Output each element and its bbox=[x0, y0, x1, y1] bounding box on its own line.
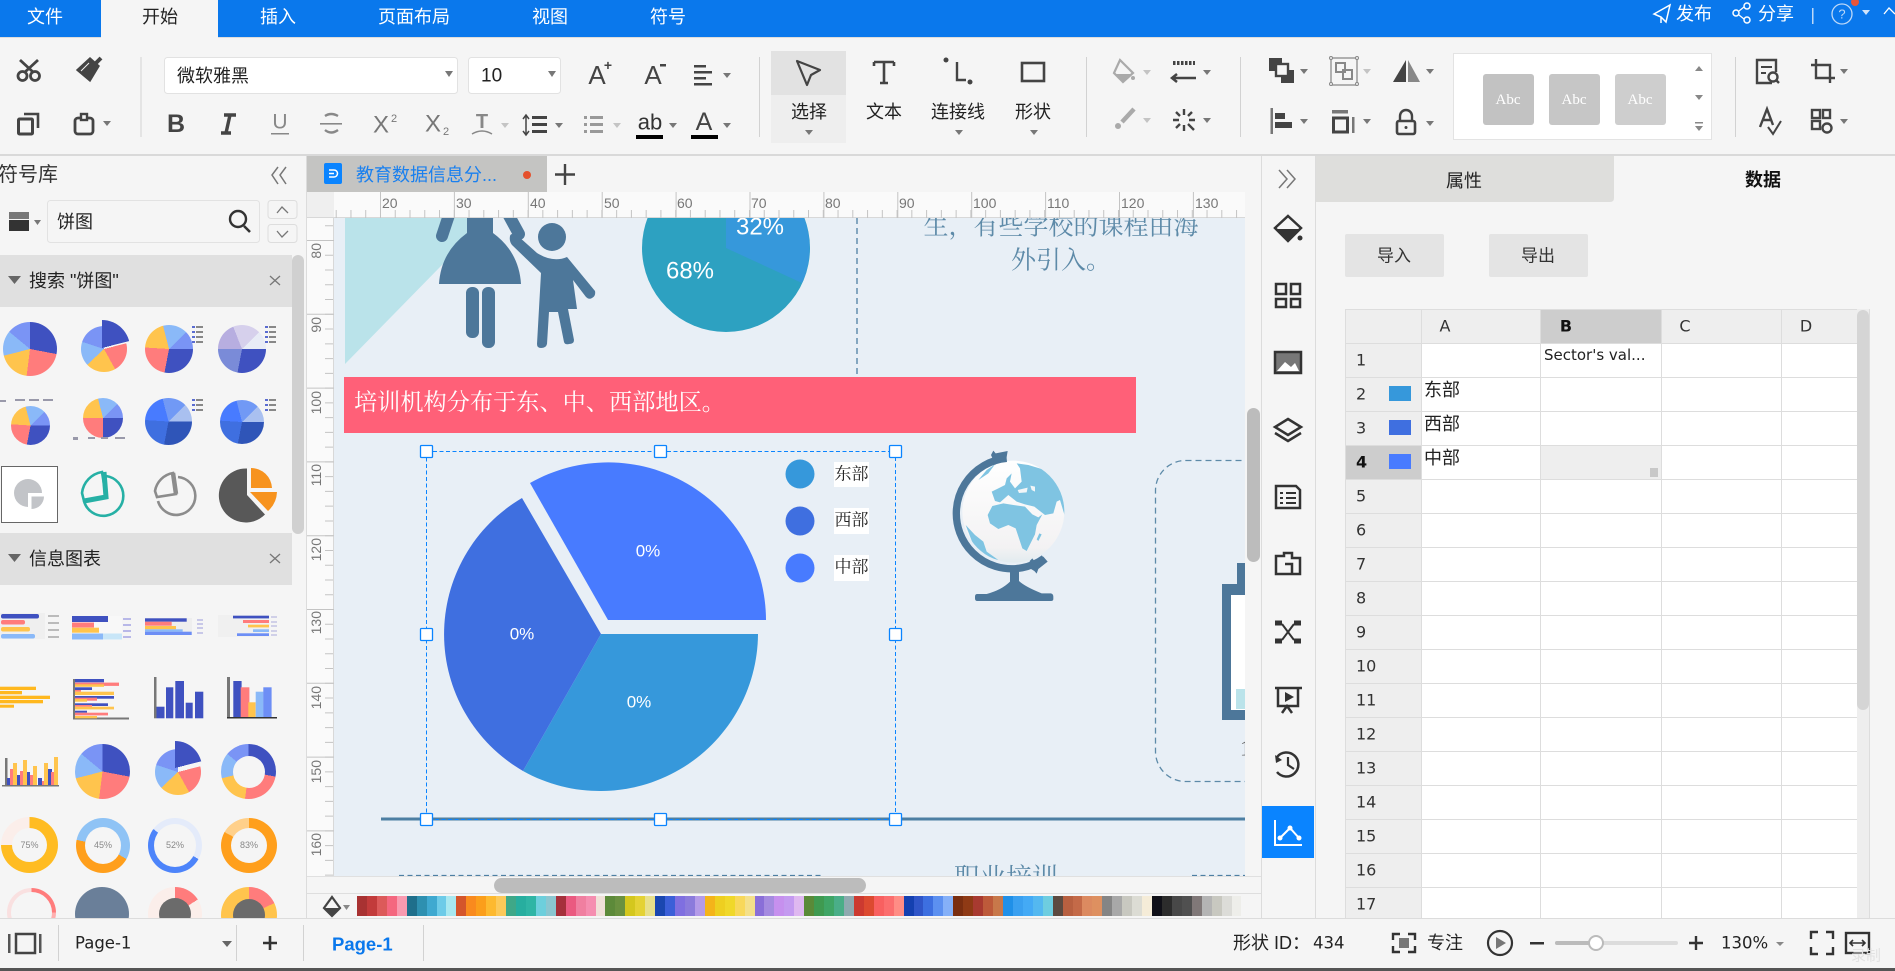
export button bbox=[1489, 234, 1588, 277]
text format icons: U bbox=[272, 110, 288, 134]
shape id readout bbox=[1233, 933, 1344, 953]
data table: 5 bbox=[1356, 486, 1366, 506]
icon: mother and child bbox=[439, 210, 595, 348]
bar chart thumbnails bbox=[0, 614, 277, 786]
document tab strip bbox=[307, 156, 1261, 192]
data table: 西部 bbox=[1424, 414, 1460, 434]
focus mode control bbox=[1393, 933, 1463, 953]
data table bbox=[1345, 309, 1857, 918]
library scrollbar bbox=[292, 255, 304, 534]
vertical ruler: 130 bbox=[308, 611, 324, 634]
pie outline icons and mini legends bbox=[0, 326, 277, 522]
shape tool button bbox=[1015, 63, 1051, 122]
data table: 3 bbox=[1356, 418, 1366, 438]
symbol library panel bbox=[0, 156, 307, 918]
shape tool button: 形状 bbox=[1015, 102, 1051, 122]
text format icons: ab bbox=[638, 110, 662, 134]
data table scrollbar bbox=[1857, 309, 1870, 918]
faint recording watermark: 录制 bbox=[1851, 948, 1881, 964]
main pie chart: 0% bbox=[627, 692, 651, 712]
pie thumbnail row 3 wedge bbox=[148, 741, 202, 795]
selected thumbnail white box bbox=[1, 466, 58, 523]
connector tool button bbox=[931, 58, 985, 122]
text format icons: A bbox=[644, 60, 662, 90]
data table: 7 bbox=[1356, 554, 1366, 574]
donut 75 percent bbox=[1, 817, 58, 873]
connector tool button: 连接线 bbox=[931, 102, 985, 122]
horizontal ruler: 60 bbox=[677, 195, 693, 211]
font family selector: 微软雅黑 bbox=[177, 66, 249, 86]
horizontal ruler: 70 bbox=[751, 195, 767, 211]
main pie chart: 0% bbox=[510, 624, 534, 644]
bottom status bar: Page-1 bbox=[75, 934, 131, 952]
donut 83 percent bbox=[221, 818, 277, 873]
data table: C bbox=[1679, 316, 1691, 336]
right properties panel background and tabs: 属性 bbox=[1446, 171, 1482, 191]
vertical ruler: 160 bbox=[308, 833, 324, 856]
vertical ruler: 90 bbox=[308, 317, 324, 333]
pie thumbnail 6 bbox=[83, 398, 123, 438]
colour palette bar background and fill icon bbox=[307, 893, 1261, 918]
top menu bar: 符号 bbox=[650, 7, 686, 27]
top menu bar: 页面布局 bbox=[378, 7, 450, 27]
text format icons: X bbox=[425, 110, 441, 138]
pie thumbnail 1 bbox=[3, 322, 57, 376]
horizontal ruler: 50 bbox=[604, 195, 620, 211]
donut 45 percent: 45% bbox=[94, 840, 112, 850]
pie thumbnail 3 with legend bbox=[145, 325, 193, 373]
library section header: search: 搜索 "饼图" bbox=[29, 271, 119, 291]
top menu bar: 插入 bbox=[260, 7, 296, 27]
text tool button: 文本 bbox=[866, 102, 902, 122]
active chart data tab icon bbox=[1262, 806, 1314, 858]
data table: 4 bbox=[1356, 452, 1367, 472]
canvas scrollbars bbox=[307, 218, 1261, 894]
vertical ruler: 140 bbox=[308, 686, 324, 709]
top menu bar: 视图 bbox=[532, 7, 568, 27]
right sidebar icons bbox=[1261, 156, 1316, 918]
import button bbox=[1345, 234, 1444, 277]
clipboard icons bbox=[18, 58, 101, 134]
lower dashed boxes tops bbox=[399, 874, 1245, 876]
text block: foreign courses: 外引入。 bbox=[1011, 246, 1111, 274]
horizontal ruler: 130 bbox=[1195, 195, 1219, 211]
data table: Sector's val... bbox=[1544, 346, 1645, 364]
vertical ruler: 150 bbox=[308, 760, 324, 783]
text format icons: 2 bbox=[443, 126, 449, 138]
pie thumbnail 7 blue bbox=[145, 398, 192, 445]
top menu bar: ? bbox=[1838, 6, 1846, 22]
page tools icons bbox=[1757, 59, 1835, 134]
pink banner heading: 培训机构分布于东、中、西部地区。 bbox=[354, 390, 725, 416]
donut thumbnail row 3 bbox=[221, 744, 276, 799]
data table: 17 bbox=[1356, 894, 1376, 914]
export button: 导出 bbox=[1521, 246, 1555, 266]
library section header: infographics: 信息图表 bbox=[29, 549, 101, 569]
disabled dropdown arrows in toolbar bbox=[501, 69, 1371, 128]
chart legend: 中部 bbox=[834, 558, 868, 576]
horizontal ruler bbox=[307, 192, 1245, 218]
data table: 9 bbox=[1356, 622, 1366, 642]
shape id readout: 形状 ID： bbox=[1233, 933, 1310, 953]
pie thumbnail row 3 b bbox=[155, 749, 201, 795]
vertical ruler: 80 bbox=[308, 243, 324, 259]
selection frame with handles bbox=[420, 446, 902, 826]
text format icons: A bbox=[696, 108, 713, 136]
data table: 11 bbox=[1356, 690, 1376, 710]
data table: D bbox=[1800, 316, 1812, 336]
data table: A bbox=[1440, 316, 1451, 336]
pie thumbnail 8 blue bbox=[220, 400, 264, 444]
text tool button bbox=[866, 62, 902, 122]
clipped gauge thumbnail 2 bbox=[75, 887, 129, 941]
right properties panel background and tabs bbox=[1316, 156, 1895, 918]
pink banner heading bbox=[344, 377, 1136, 433]
library section header: search bbox=[0, 255, 292, 307]
pie chart: 32% and 68%: 68% bbox=[666, 258, 714, 284]
pie thumbnail row 3 a bbox=[75, 744, 130, 799]
horizontal ruler: 90 bbox=[899, 195, 915, 211]
zoom controls: 130% bbox=[1721, 934, 1768, 952]
zoom controls bbox=[1488, 931, 1869, 955]
vertical ruler: 100 bbox=[308, 391, 324, 414]
donut 75 percent: 75% bbox=[20, 840, 38, 850]
text format icons: + bbox=[604, 57, 612, 73]
style presets gallery: Abc bbox=[1562, 92, 1587, 108]
data table: 6 bbox=[1356, 520, 1366, 540]
style presets gallery: Abc bbox=[1496, 92, 1521, 108]
text block: foreign courses: 生，有些学校的课程由海 bbox=[923, 212, 1199, 240]
canvas page bbox=[334, 218, 1245, 876]
top menu bar: 发布 bbox=[1676, 4, 1712, 24]
bottom status bar bbox=[0, 918, 1895, 971]
library section header: infographics bbox=[0, 533, 292, 585]
right properties panel background and tabs: 数据 bbox=[1745, 170, 1781, 190]
select tool button bbox=[771, 51, 846, 143]
text format icons: A bbox=[588, 60, 606, 90]
dropdown arrows in toolbar bbox=[103, 69, 1848, 135]
ribbon toolbar background bbox=[0, 37, 1895, 156]
data table: 14 bbox=[1356, 792, 1376, 812]
font size selector: 10 bbox=[481, 66, 502, 86]
dashed divider bbox=[856, 218, 858, 377]
text block: foreign courses bbox=[924, 218, 1198, 271]
colour palette swatches bbox=[357, 896, 1241, 916]
style presets gallery bbox=[1454, 54, 1712, 140]
horizontal ruler: 120 bbox=[1121, 195, 1145, 211]
chart legend bbox=[786, 460, 869, 582]
pie thumbnail 5 bbox=[11, 406, 50, 445]
data table: B bbox=[1560, 316, 1572, 336]
horizontal ruler: 40 bbox=[530, 195, 546, 211]
data table: 东部 bbox=[1424, 380, 1460, 400]
clipped gauge thumbnail 3 bbox=[148, 887, 202, 941]
horizontal ruler: 100 bbox=[973, 195, 997, 211]
donut 45 percent bbox=[76, 818, 130, 873]
light blue triangle decoration bbox=[345, 218, 467, 364]
selected thumbnail wedge bbox=[19, 484, 44, 509]
fill and line style icons bbox=[1114, 60, 1196, 131]
vertical ruler: 110 bbox=[308, 464, 324, 486]
donut 83 percent: 83% bbox=[240, 840, 258, 850]
pie chart: 32% and 68% bbox=[642, 218, 810, 332]
horizontal ruler: 20 bbox=[382, 195, 398, 211]
top menu bar bbox=[0, 0, 1895, 37]
pie thumbnail 2 exploded bbox=[81, 326, 127, 372]
symbol library thumbnails bbox=[0, 320, 277, 918]
data table: 16 bbox=[1356, 860, 1376, 880]
data table: 10 bbox=[1356, 656, 1376, 676]
section heading: vocational training: 职业培训 bbox=[954, 864, 1058, 892]
data table: 中部 bbox=[1424, 448, 1460, 468]
top menu bar: 分享 bbox=[1758, 4, 1794, 24]
pie thumbnail 2 wedge bbox=[74, 320, 130, 376]
donut 52 percent bbox=[148, 818, 202, 873]
text format icons: T bbox=[476, 111, 488, 133]
data table: 8 bbox=[1356, 588, 1366, 608]
data table: 13 bbox=[1356, 758, 1376, 778]
data table: 15 bbox=[1356, 826, 1376, 846]
top menu bar: 开始 bbox=[142, 7, 178, 27]
horizontal ruler: 80 bbox=[825, 195, 841, 211]
main pie chart bbox=[444, 462, 766, 791]
text format icons: 2 bbox=[391, 113, 397, 125]
selected thumbnail pie bbox=[14, 479, 42, 507]
pie chart: 32% and 68%: 32% bbox=[736, 214, 784, 240]
vertical ruler: 120 bbox=[308, 538, 324, 561]
dashed callout box bbox=[1154, 460, 1245, 782]
arrange icons bbox=[1269, 56, 1420, 134]
bottom status bar: Page-1 bbox=[332, 934, 393, 954]
top menu bar: 文件 bbox=[27, 7, 63, 27]
chart legend: 西部 bbox=[834, 510, 868, 530]
text format icons bbox=[167, 57, 718, 139]
import button: 导入 bbox=[1377, 246, 1411, 266]
donut 52 percent: 52% bbox=[166, 840, 184, 850]
dashed callout box: 1 bbox=[1240, 736, 1251, 760]
document tab strip: 教育数据信息分... bbox=[356, 165, 497, 185]
style presets gallery: Abc bbox=[1628, 92, 1653, 108]
data table: 12 bbox=[1356, 724, 1376, 744]
symbol library panel: 饼图 bbox=[57, 212, 93, 232]
horizontal ruler: 30 bbox=[456, 195, 472, 211]
icon: globe bbox=[956, 451, 1065, 601]
text format icons: B bbox=[167, 110, 185, 138]
main pie chart: 0% bbox=[636, 542, 660, 560]
data table: 1 bbox=[1356, 350, 1366, 370]
horizontal ruler: 110 bbox=[1047, 195, 1070, 211]
shape id readout: 434 bbox=[1313, 934, 1344, 952]
data table: 2 bbox=[1356, 384, 1366, 404]
chart legend: 东部 bbox=[834, 464, 868, 484]
select tool button: 选择 bbox=[791, 102, 827, 122]
horizontal divider line bbox=[381, 818, 1245, 820]
focus mode control: 专注 bbox=[1427, 933, 1463, 953]
clipped gauge thumbnail 1 bbox=[7, 888, 56, 937]
font family selector bbox=[164, 58, 458, 94]
clipped gauge thumbnail 4 bbox=[221, 887, 277, 943]
text format icons: X bbox=[373, 112, 389, 138]
font size selector bbox=[468, 58, 560, 94]
vertical ruler bbox=[307, 218, 334, 876]
pie thumbnail 4 with legend bbox=[218, 325, 266, 373]
